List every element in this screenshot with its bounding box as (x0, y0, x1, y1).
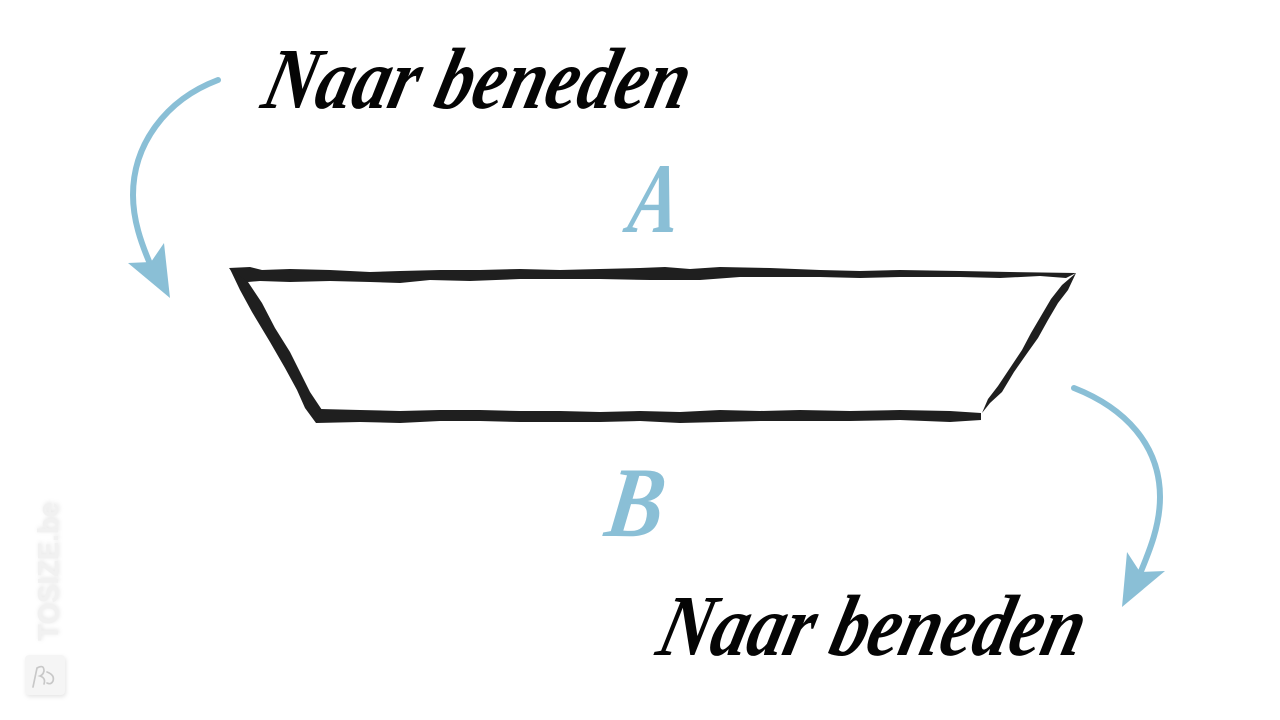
shape: trapezoid with brush outline (229, 267, 1076, 423)
arrow: top left curved arrow (128, 80, 218, 298)
label: side A: A (618, 142, 689, 254)
heading: bottom label: Naar beneden (648, 579, 1097, 675)
arrow: bottom right curved arrow (1074, 388, 1165, 607)
edge: top brush stroke (229, 267, 1076, 283)
edge: left brush stroke (230, 269, 330, 423)
label: side B: B (599, 446, 673, 558)
icon: watermark logo (25, 655, 65, 695)
edge: right thin brush stroke (982, 273, 1076, 413)
edge: bottom brush stroke (316, 409, 981, 423)
heading: top label: Naar beneden (253, 32, 702, 128)
watermark: brand text: TOSIZE.be (33, 502, 65, 641)
